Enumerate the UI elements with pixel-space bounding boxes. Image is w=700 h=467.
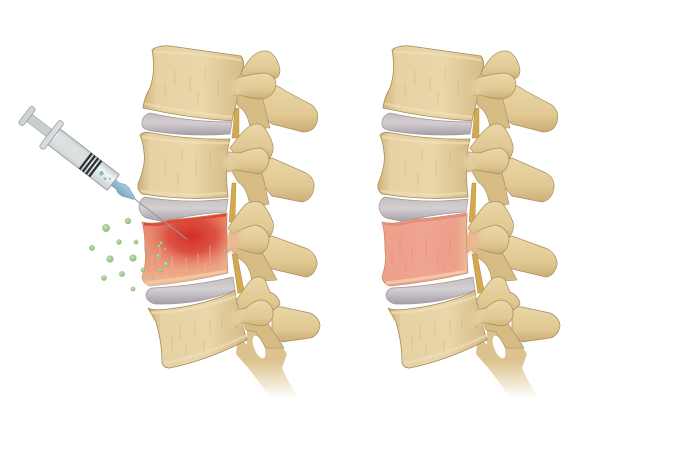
superior articular facets (228, 51, 280, 317)
spine: right, after treatment (378, 46, 560, 398)
lower process strands fading out (236, 323, 298, 398)
spine: left, before treatment (138, 46, 320, 398)
plunger rod and flange (18, 105, 62, 147)
barrel (39, 120, 124, 196)
vertebra: inflamed, red (142, 213, 240, 286)
needle hub (110, 178, 137, 203)
spinal canal strips (229, 108, 244, 294)
syringe with needle (14, 101, 197, 253)
laminae (228, 92, 284, 348)
green particles (89, 218, 168, 291)
vertebral bodies (138, 46, 247, 368)
pedicle-to-body blends (222, 78, 244, 327)
bone highlights and fibres (142, 52, 245, 363)
vertebra: healing, salmon (382, 213, 480, 286)
pedicle knobs (226, 73, 276, 328)
transverse processes (258, 84, 320, 342)
intervertebral discs (139, 113, 235, 304)
needle (133, 198, 187, 239)
